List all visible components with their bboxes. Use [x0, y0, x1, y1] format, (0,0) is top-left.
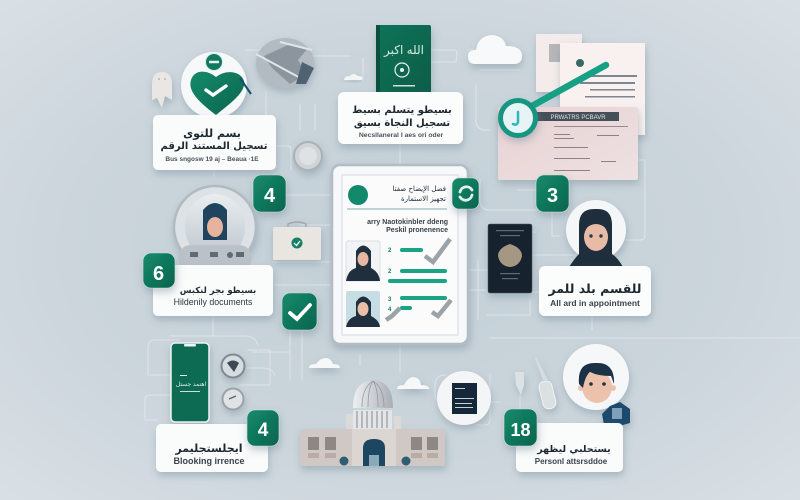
panel: appointment card — [539, 266, 651, 316]
icon: ghost figurine — [152, 72, 172, 108]
icon: silver coin — [294, 142, 322, 170]
panel: appointment card: All ard in appointment — [550, 298, 640, 308]
panel: central checklist form: تجهيز الاستمارة — [401, 195, 446, 203]
icon: green passport — [376, 25, 431, 95]
badge: number 18: 18 — [510, 420, 531, 440]
checklist rows — [388, 248, 447, 310]
icon: small cloud — [344, 74, 362, 80]
panel: personal attendance card — [516, 423, 623, 472]
badge: number 4 bottom — [247, 410, 279, 446]
panel: central checklist form: 2 — [388, 248, 392, 254]
badge: number 4 top: 4 — [264, 185, 276, 207]
panel: personal attendance card: Personl attsrsddoe — [535, 457, 608, 466]
panel: identity documents card — [153, 265, 273, 316]
badge: number 4 bottom: 4 — [258, 420, 269, 441]
panel: identity documents card: Hildenily documents — [174, 297, 253, 307]
form english heading: arry Naotokinbler ddeng — [367, 219, 448, 226]
panel: central checklist form: Peskil pronenence — [386, 227, 448, 234]
icon: tool figurines — [515, 357, 557, 410]
icon: grey globe — [256, 38, 314, 88]
icon: smartphone — [171, 343, 209, 422]
icon: document pile with magnifier: PRWATRS PCBAVR — [550, 115, 606, 121]
icon: white cloud — [468, 35, 522, 64]
badge: number 18 — [504, 409, 537, 446]
icon: blue shield — [602, 402, 630, 427]
form arabic heading: فصل الإيضاح صفتا — [392, 185, 446, 193]
panel: top-centre step card: بسيطو يتسلم بسيط — [352, 105, 452, 116]
icon: green passport: الله اكبر — [383, 43, 424, 58]
icon: heart with check — [181, 52, 251, 118]
panel: top-centre step card — [338, 92, 463, 144]
icon: form seal — [348, 185, 368, 205]
badge: number 6: 6 — [153, 263, 164, 285]
badge: number 6 — [143, 253, 175, 288]
panel: top-centre step card: Necsllaneral I aes ori oder — [359, 132, 443, 139]
badge: number 3 — [536, 175, 569, 212]
panel: central checklist form: 3 — [388, 297, 392, 303]
panel: central checklist form — [332, 165, 468, 344]
panel: booking card: Blooking irrence — [173, 456, 245, 466]
panel: personal attendance card: يستحلبي ليظهر — [536, 444, 611, 455]
icon: helmet capsule with face — [174, 186, 256, 268]
panel: central checklist form: 4 — [388, 307, 392, 313]
panel: central checklist form: 2 — [388, 269, 392, 275]
icon: boy portrait — [563, 344, 629, 410]
icon: smartphone: اهتمد جستل — [176, 381, 207, 388]
badge: number 3: 3 — [547, 185, 558, 207]
panel: identity documents card: بسيطو بجر لنكبس — [180, 286, 256, 296]
photo: first woman — [346, 241, 380, 281]
badge: refresh — [452, 178, 479, 209]
icon: document circle — [437, 371, 491, 425]
photo: second woman — [346, 291, 380, 327]
panel: top-left step card: Bus sngosw 19 aj – Beaua ·1E — [165, 156, 259, 163]
badge: check — [282, 293, 317, 330]
panel: booking card: ايجلستجليمر — [174, 442, 243, 455]
icon: document pile with magnifier — [498, 34, 645, 180]
check marks — [386, 239, 451, 320]
icon: domed building — [300, 380, 445, 466]
icon: woman portrait — [566, 200, 626, 267]
badge: number 4 top — [253, 175, 286, 212]
icon: navy passport — [488, 224, 532, 293]
panel: top-left step card: بسم للتوى — [183, 127, 241, 140]
icon: briefcase with check — [273, 222, 321, 260]
icon: clouds — [309, 358, 429, 389]
panel: top-centre step card: تسجيل النجاة بسيق — [354, 118, 450, 129]
icon: dial clocks — [222, 354, 244, 410]
panel: appointment card: للقسم بلد للمر — [548, 281, 642, 296]
panel: top-left step card: تسجيل المستند الرقم — [161, 141, 268, 152]
panel: top-left step card — [153, 115, 276, 170]
panel: booking card — [156, 424, 268, 472]
